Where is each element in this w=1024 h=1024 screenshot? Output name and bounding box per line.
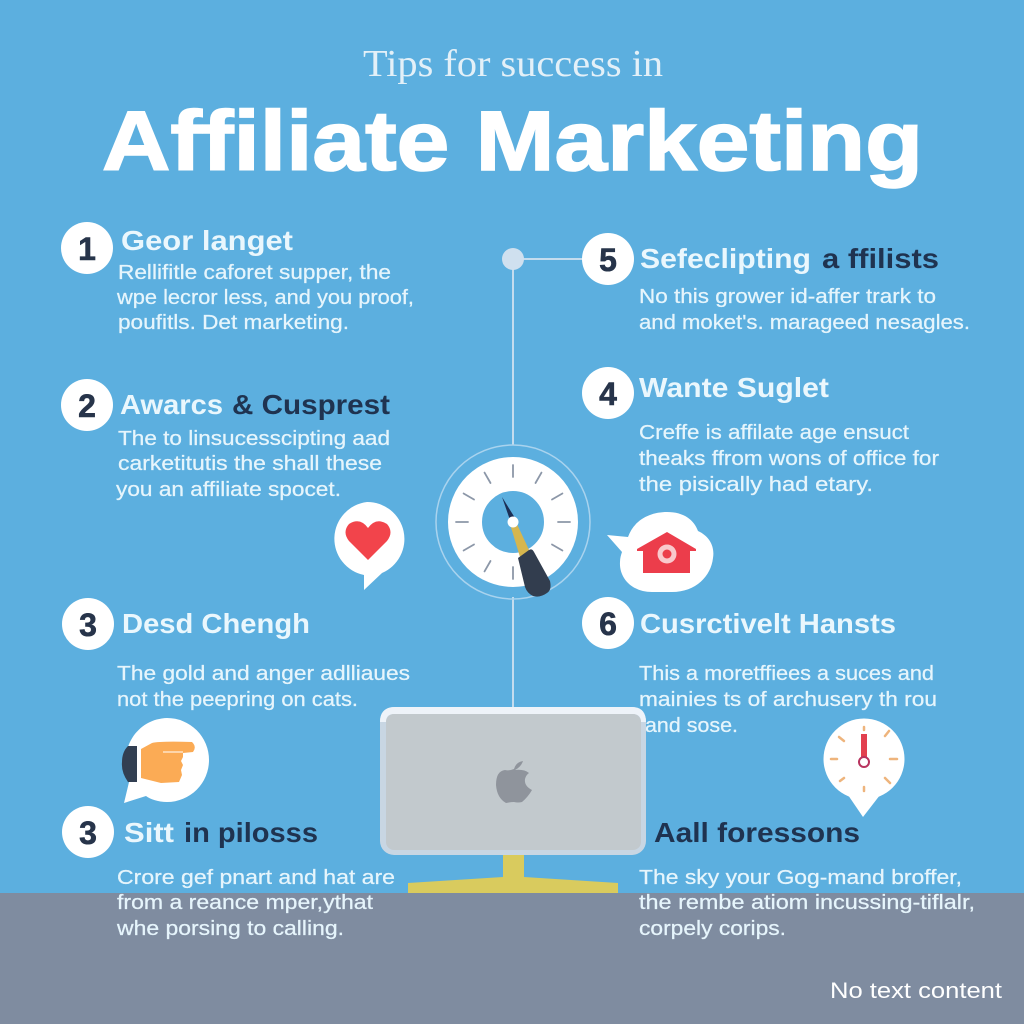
panel: all foressons: the rembe atiom incussing-tiflalr, [639,891,975,914]
panel: tip 3 second: from a reance mper,ythat [117,891,373,914]
title: Affiliate Marketing [102,94,923,188]
panel: tip 3: not the peepring on cats. [117,688,358,711]
icon: gauge dial [436,445,590,599]
panel: tip 4: Creffe is affilate age ensuct [639,421,909,444]
panel: tip 1: Rellifitle caforet supper, the [118,261,391,284]
panel: tip 2: you an affiliate spocet. [116,478,341,501]
panel: tip 4 [582,367,939,496]
panel: tip 2 [61,379,390,501]
panel: all foressons: Aall foressons [654,817,860,848]
panel: tip 6: and sose. [645,714,738,737]
panel: tip 1: Geor langet [121,225,293,256]
panel: tip 1: poufitls. Det marketing. [118,311,349,334]
panel: tip 4: Wante Suglet [639,372,829,403]
panel: tip 2: & Cusprest [232,389,390,420]
panel: tip 2: The to linsucesscipting aad [118,427,390,450]
panel: tip 4: the pisically had etary. [639,473,873,496]
title: Tips for success in [363,43,663,85]
panel: all foressons: corpely corips. [639,917,786,940]
panel: tip 4: theaks ffrom wons of office for [639,447,939,470]
panel: tip 3 [62,598,410,711]
panel: tip 3 second: 3 [79,815,97,851]
panel: tip 2: carketitutis the shall these [118,452,382,475]
panel: tip 3 second: in pilosss [184,817,318,848]
panel: tip 5: Sefeclipting [640,243,811,274]
footer note: No text content [830,978,1002,1003]
panel: tip 5: a ffilists [822,243,939,274]
icon: pointing hand speech bubble [122,718,209,803]
icon: house speech bubble [607,512,713,592]
central timeline [502,248,584,708]
panel: tip 5 [582,233,970,334]
icon: monitor [380,707,646,893]
panel: tip 1 [61,222,414,334]
panel: all foressons: The sky your Gog-mand broffer, [639,866,962,889]
panel: tip 5: and moket's. marageed nesagles. [639,311,970,334]
bottom grey band [0,893,1024,1024]
panel: tip 2: Awarcs [120,389,223,420]
panel: all foressons [639,817,975,940]
panel: tip 1: wpe lecror less, and you proof, [116,286,414,309]
panel: tip 1: 1 [78,231,96,267]
panel: tip 3 second: Sitt [124,817,174,848]
panel: tip 3 second: Crore gef pnart and hat are [117,866,395,889]
panel: tip 3: 3 [79,607,97,643]
panel: tip 4: 4 [599,376,617,412]
panel: tip 5: 5 [599,242,617,278]
icon: heart speech bubble [334,502,404,590]
panel: tip 5: No this grower id-affer trark to [639,285,936,308]
panel: tip 3 second [62,806,395,940]
panel: tip 3: The gold and anger adlliaues [117,662,410,685]
panel: tip 3 second: whe porsing to calling. [116,917,344,940]
icon: clock speech bubble [824,718,904,817]
panel: tip 2: 2 [78,388,96,424]
panel: tip 6: This a moretffiees a suces and [639,662,934,685]
panel: tip 6 [582,597,937,737]
panel: tip 3: Desd Chengh [122,608,310,639]
panel: tip 6: Cusrctivelt Hansts [640,608,896,639]
panel: tip 6: 6 [599,606,617,642]
panel: tip 6: mainies ts of archusery th rou [639,688,937,711]
title [102,43,923,188]
